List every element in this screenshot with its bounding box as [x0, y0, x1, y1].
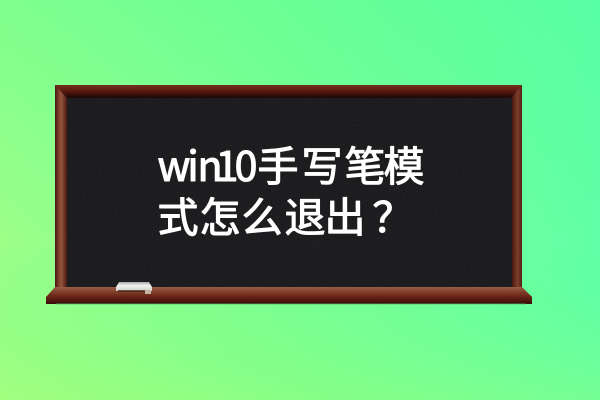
chalkboard surface — [67, 98, 512, 288]
wooden frame — [55, 85, 522, 290]
chalk piece — [116, 282, 152, 294]
title line 2: 式怎么退出？ — [158, 184, 414, 244]
title line 1: win10手写笔模 — [158, 133, 424, 193]
chalk ledge — [46, 287, 532, 305]
title — [158, 133, 424, 244]
